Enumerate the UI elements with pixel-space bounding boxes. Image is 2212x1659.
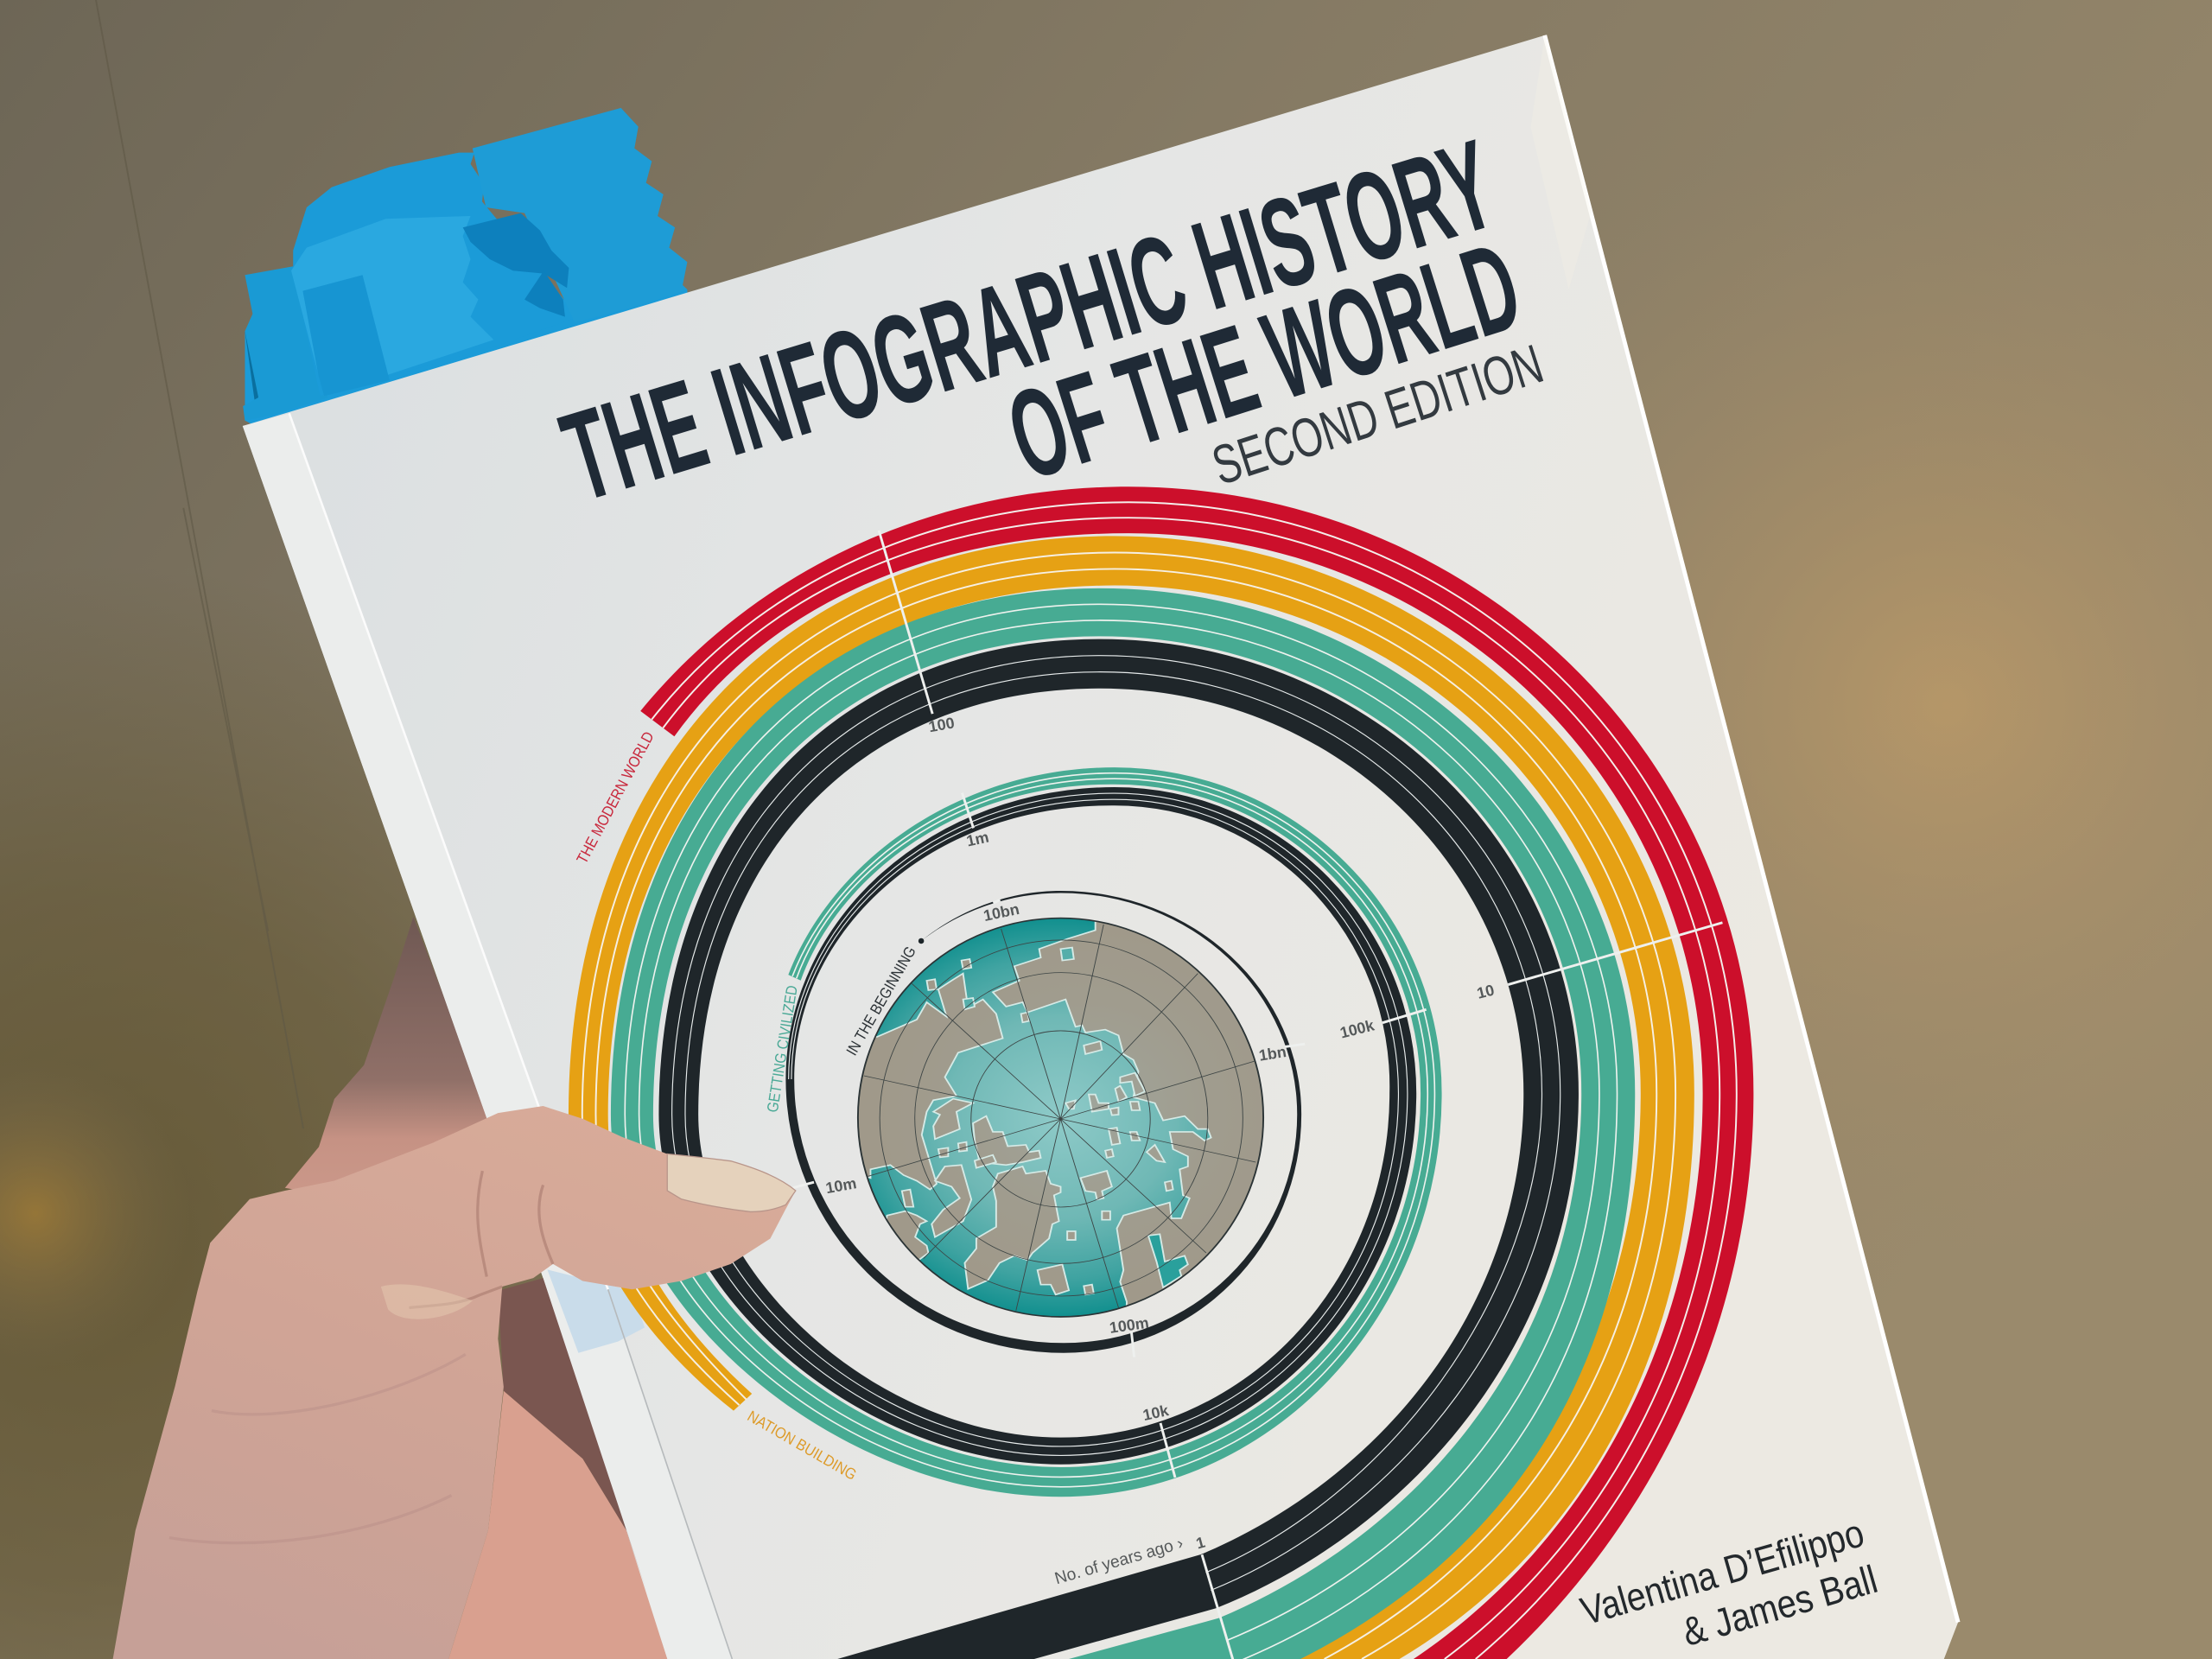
scale labels: 10 [1475, 982, 1496, 1002]
scale labels [824, 714, 1496, 1588]
spiral band: the modern world (red) [640, 486, 1753, 1659]
authors: & James Ball [1677, 1557, 1882, 1655]
scale labels: 1 [1194, 1534, 1207, 1553]
scale labels: No. of years ago › [1052, 1534, 1185, 1588]
scale labels: 10bn [982, 900, 1020, 925]
scale labels: 1m [965, 829, 990, 850]
hand holding the book [113, 1106, 796, 1659]
scale labels: 100 [927, 714, 956, 735]
scale labels: 10k [1141, 1402, 1170, 1424]
globe: polar map [854, 910, 1263, 1342]
scale labels: 1bn [1257, 1043, 1287, 1065]
book cover [243, 35, 1958, 1659]
start dot and globe [854, 910, 1263, 1342]
era label: nation building: NATION BUILDING [745, 1408, 860, 1484]
scale labels: 100m [1109, 1314, 1150, 1337]
time scale tick marks [793, 531, 1722, 1659]
thumbnail [667, 1154, 796, 1211]
era label: in the beginning: IN THE BEGINNING [843, 944, 919, 1058]
scale labels: 100k [1338, 1016, 1376, 1042]
authors: Valentina D’Efilippo [1576, 1510, 1869, 1633]
blue page tabs [243, 108, 687, 447]
fingers behind the book [285, 917, 508, 1213]
spiral band: getting civilized (teal) [611, 588, 1635, 1659]
era label: the modern world: THE MODERN WORLD [573, 728, 658, 867]
scale labels: 10m [824, 1174, 858, 1197]
title: OF THE WORLD [993, 214, 1535, 506]
subtitle: second edition: SECOND EDITION [1205, 333, 1550, 497]
era label: getting civilized: GETTING CIVILIZED [764, 984, 801, 1114]
title [548, 113, 1535, 529]
spiral band: nation building (orange) [569, 536, 1694, 1659]
spiral band: in the beginning (black) [658, 639, 1579, 1659]
